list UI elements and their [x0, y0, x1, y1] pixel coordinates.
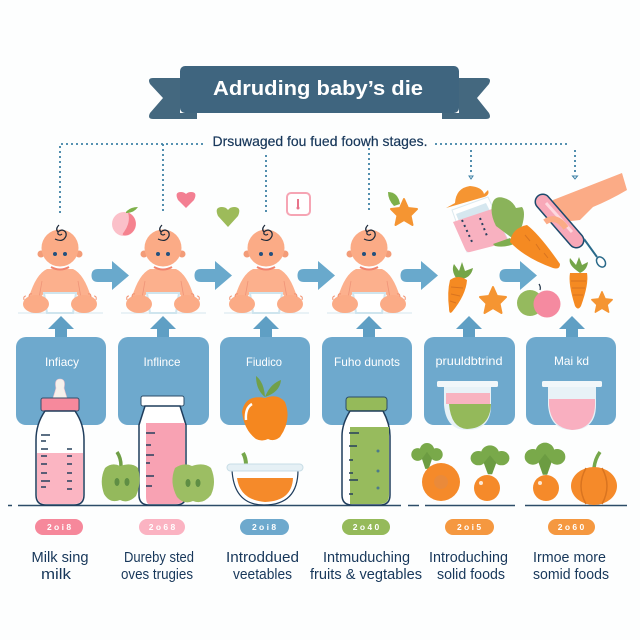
small carrot 1	[448, 262, 473, 313]
orange vegetable 3	[525, 443, 565, 501]
captions: Irmoe more	[533, 549, 606, 566]
orange bowl	[227, 453, 303, 505]
date pills: 2 o i 5	[457, 522, 481, 532]
orange vegetable 2	[471, 445, 509, 501]
date pills: 2 o 6 8	[149, 522, 175, 532]
captions: veetables	[233, 566, 292, 583]
panel: stage 5	[424, 337, 515, 425]
date pills: 2 o 4 0	[353, 522, 379, 532]
floating icon: pink apple	[112, 207, 138, 236]
panel: stage 1	[16, 337, 106, 425]
captions: solid foods	[437, 566, 505, 583]
panel: stage 2	[118, 337, 209, 425]
baby 4	[327, 225, 412, 313]
panel: stage 5: pruuldbtrind	[436, 354, 502, 368]
subtitle: Drsuwaged fou fued foowh stages.	[212, 133, 428, 149]
panel: stage 4: Fuho dunots	[334, 355, 400, 369]
star 1	[480, 287, 506, 313]
baby 3	[224, 225, 309, 313]
title text: Adruding baby’s die	[213, 78, 423, 100]
floating icon: orange star	[388, 192, 417, 225]
captions: fruits & vegtables	[310, 566, 422, 583]
captions: somid foods	[533, 566, 609, 583]
big carrot	[492, 197, 560, 268]
floating icon: green heart	[217, 207, 239, 227]
captions: Introddued	[226, 549, 299, 566]
bottle 2 with apples	[102, 396, 214, 505]
captions: Milk sing	[32, 549, 88, 566]
baby 2	[121, 225, 206, 313]
bottle 1	[36, 379, 84, 505]
up arrows	[48, 316, 585, 338]
pumpkin	[571, 452, 617, 505]
orange apple	[242, 376, 288, 440]
captions: Intmuduching	[323, 549, 410, 566]
small carrot 2	[570, 257, 588, 308]
panel: stage 6	[526, 337, 616, 425]
title banner	[149, 66, 490, 119]
dotted connectors	[60, 144, 578, 213]
date pills: 2 o i 8	[47, 522, 71, 532]
captions: milk	[41, 566, 72, 583]
green and pink apples	[517, 284, 560, 318]
food jar	[446, 186, 508, 252]
date pills: 2 o i 8	[252, 522, 276, 532]
bowl with pink puree	[542, 381, 602, 430]
baby 1	[18, 225, 103, 313]
floating icon: pink square	[287, 193, 310, 215]
panel: stage 2: Inflince	[144, 355, 181, 369]
panel: stage 3: Fiudico	[246, 355, 282, 369]
captions	[32, 549, 609, 583]
orange vegetable 1	[411, 443, 460, 501]
captions: Introduching	[429, 549, 508, 566]
floating icon: pink heart	[177, 192, 195, 208]
star 2	[592, 292, 612, 312]
panel: stage 1: Infiacy	[45, 355, 79, 369]
baseline	[8, 504, 627, 506]
panel: stage 4	[322, 337, 412, 425]
green bottle	[342, 397, 390, 505]
panel: stage 6: Mai kd	[554, 354, 589, 368]
panel: stage 3	[220, 337, 310, 425]
arrows between stages	[92, 261, 537, 290]
captions: Dureby sted	[124, 549, 194, 566]
captions: oves trugies	[121, 566, 193, 583]
bowl with green puree	[437, 381, 498, 430]
date pills: 2 o 6 0	[558, 522, 584, 532]
date pills	[35, 519, 595, 535]
hand with spoon syringe	[532, 173, 627, 269]
